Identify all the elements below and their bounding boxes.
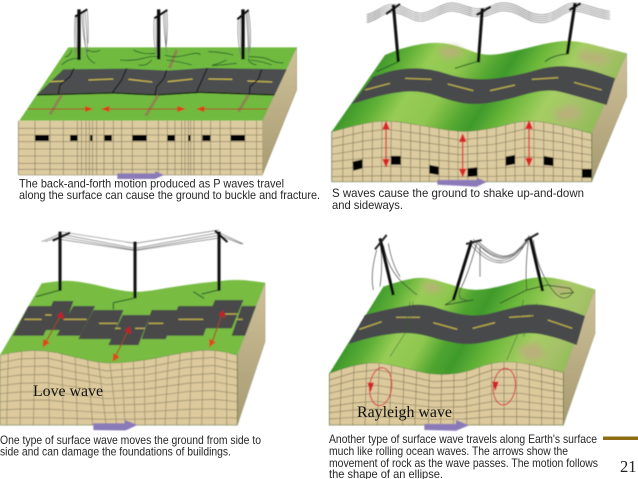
caption: P waves: along the surface can cause the ground to buckle and fracture. [19, 189, 320, 202]
green wavy surface [329, 277, 595, 374]
red double-headed arrows [43, 310, 225, 362]
caption: Love wave: One type of surface wave moves the ground from side to [0, 434, 261, 447]
block side face [563, 289, 595, 425]
road [348, 300, 585, 360]
caption: Rayleigh wave: movement of rock as the wave passes. The motion follows [329, 457, 598, 470]
purple direction arrow [117, 171, 164, 179]
caption: P waves: The back-and-forth motion produced as P waves travel [19, 178, 284, 190]
caption: Love wave [0, 434, 261, 458]
label: Love wave: Love wave [33, 383, 103, 400]
block side face [592, 53, 627, 182]
panel: S wave block diagram [332, 3, 627, 187]
panel: Rayleigh wave block diagram [329, 233, 595, 431]
buried black blocks [353, 155, 592, 178]
slide accent bar [603, 436, 638, 440]
road with cracks [37, 68, 287, 96]
block side face [262, 47, 297, 175]
panel: Love wave block diagram [0, 230, 265, 431]
block front face with grid [0, 347, 237, 427]
utility poles [75, 9, 251, 60]
purple direction arrow [424, 420, 469, 431]
caption: Rayleigh wave: Another type of surface wave travels along Earth's surface [329, 433, 597, 446]
utility poles and wires [42, 230, 243, 298]
caption: S waves: and sideways. [332, 199, 403, 212]
ground cracks [62, 50, 283, 66]
utility poles and wires [367, 3, 610, 62]
caption: P waves [19, 178, 320, 202]
panel: P wave block diagram [18, 9, 297, 179]
green wavy surface [0, 280, 265, 363]
block front face with grid [329, 360, 563, 427]
page number: 21 [620, 457, 636, 476]
ground cracks [445, 285, 573, 305]
caption: S waves: S waves cause the ground to shake up-and-down [332, 187, 584, 200]
block front face with grid [18, 121, 262, 175]
caption: Rayleigh wave [329, 433, 598, 479]
red arrows: compression and extension [28, 106, 267, 112]
green wavy surface [332, 41, 627, 133]
purple direction arrow [93, 420, 137, 431]
tan patches on surface [420, 283, 573, 362]
caption: Love wave: side and can damage the foundations of buildings. [0, 446, 231, 458]
caption: Rayleigh wave: much like rolling ocean waves. The arrows show the [329, 445, 568, 458]
caption: S waves [332, 187, 584, 212]
ground fractures [50, 50, 248, 116]
ground cracks [377, 54, 567, 72]
displaced road segments [13, 300, 256, 345]
tan patches on surface [437, 47, 610, 122]
red double-headed arrows [382, 120, 533, 177]
red ellipse motion arrows [367, 367, 517, 407]
purple direction arrow [437, 178, 487, 187]
block front face with grid [332, 117, 592, 183]
utility poles and wires [372, 233, 573, 300]
label: Rayleigh wave: Rayleigh wave [357, 404, 452, 421]
green ground surface [19, 47, 297, 121]
block side face [237, 283, 265, 425]
buried black blocks [35, 135, 245, 141]
ground cracks [36, 290, 218, 309]
road [352, 66, 615, 105]
